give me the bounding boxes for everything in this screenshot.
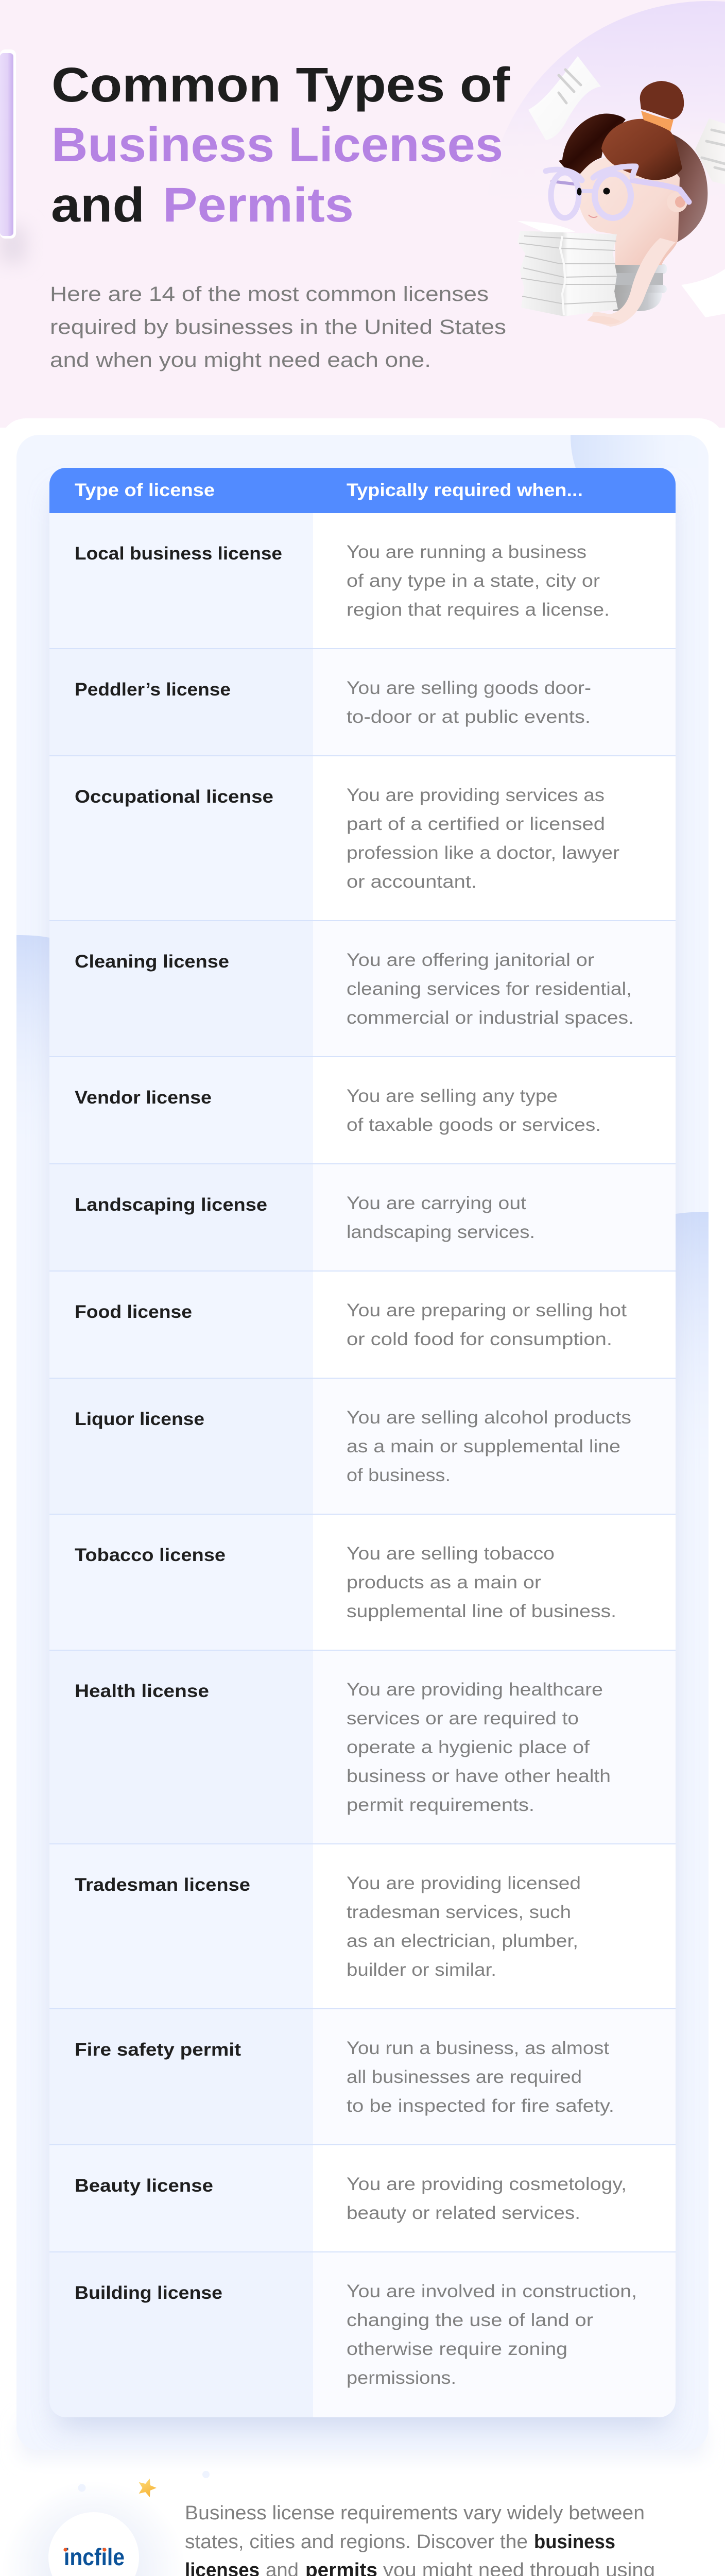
row: cleaning license: [49, 921, 676, 1058]
row: tobacco license: You are selling tobacco: [347, 1544, 555, 1564]
row: building license: You are involved in construction,: [347, 2281, 637, 2301]
row: health license: business or have other health: [347, 1766, 611, 1786]
title: Business Licenses: [51, 117, 503, 172]
footer text: [185, 2502, 655, 2576]
row: food license: Food license: [75, 1302, 192, 1322]
row: tradesman license: builder or similar.: [347, 1960, 496, 1980]
footer logo badge: [2, 2471, 223, 2576]
row: health license: operate a hygienic place of: [347, 1737, 590, 1757]
table header: [49, 468, 676, 513]
row: occupational license: profession like a doctor, lawyer: [347, 843, 619, 863]
row: vendor license: You are selling any type: [347, 1086, 558, 1106]
row: liquor license: You are selling alcohol products: [347, 1408, 631, 1428]
row: occupational license: Occupational license: [75, 787, 273, 807]
character bun: [640, 81, 684, 120]
row: cleaning license: commercial or industrial spaces.: [347, 1008, 634, 1028]
character ear: [667, 192, 687, 212]
character glasses: [546, 166, 689, 218]
row: local business license: [49, 513, 676, 650]
decorative blob left: [16, 935, 49, 1054]
row: peddler's license: You are selling goods door-: [347, 678, 591, 698]
row: health license: Health license: [75, 1681, 209, 1701]
subtitle: required by businesses in the United States: [50, 316, 506, 338]
row: beauty license: beauty or related services.: [347, 2203, 580, 2223]
row: building license: otherwise require zoning: [347, 2339, 567, 2359]
footer text: states, cities and regions. Discover the: [185, 2531, 528, 2553]
panel shadow: [21, 2421, 704, 2458]
row: local business license: Local business license: [75, 544, 282, 564]
row: landscaping license: You are carrying out: [347, 1193, 526, 1213]
row: building license: changing the use of land or: [347, 2310, 593, 2330]
row: tobacco license: products as a main or: [347, 1572, 541, 1592]
row: building license: Building license: [75, 2283, 222, 2303]
row: cleaning license: You are offering janitorial or: [347, 950, 594, 970]
row: vendor license: Vendor license: [75, 1088, 212, 1108]
title: and: [51, 178, 145, 232]
row: liquor license: of business.: [347, 1465, 451, 1485]
row: local business license: region that requires a license.: [347, 600, 610, 620]
row: liquor license: [49, 1379, 676, 1515]
row: food license: You are preparing or selling hot: [347, 1300, 627, 1320]
character front hair: [601, 119, 682, 180]
illustration: character holding paper stack: [517, 56, 725, 327]
row: peddler's license: Peddler’s license: [75, 680, 231, 700]
table header: Typically required when...: [347, 480, 583, 500]
icon: floating paper left: [528, 56, 601, 140]
icon: paper stack: [517, 221, 618, 316]
subtitle: [50, 283, 506, 371]
subtitle: Here are 14 of the most common licenses: [50, 283, 489, 306]
row: occupational license: [49, 756, 676, 922]
row: vendor license: of taxable goods or services.: [347, 1115, 601, 1135]
row: cleaning license: Cleaning license: [75, 952, 229, 972]
row: beauty license: You are providing cosmetology,: [347, 2174, 627, 2194]
title: Common Types of: [51, 58, 510, 112]
row: liquor license: as a main or supplemental line: [347, 1436, 620, 1456]
row: food license: [49, 1272, 676, 1379]
row: local business license: of any type in a state, city or: [347, 571, 600, 591]
row: health license: You are providing healthcare: [347, 1680, 603, 1700]
decorative dots: [25, 2471, 223, 2576]
row: health license: permit requirements.: [347, 1795, 534, 1815]
incfile logo: incfile: [64, 2544, 125, 2570]
footer text: Business license requirements vary widely between: [185, 2502, 645, 2524]
row: tobacco license: [49, 1515, 676, 1651]
row: building license: [49, 2252, 676, 2417]
row: landscaping license: Landscaping license: [75, 1195, 267, 1215]
row: fire safety permit: all businesses are required: [347, 2067, 582, 2087]
row: tradesman license: You are providing licensed: [347, 1873, 581, 1893]
row: landscaping license: [49, 1164, 676, 1272]
header background: [0, 0, 725, 447]
character back hair: [664, 131, 707, 242]
row: cleaning license: cleaning services for residential,: [347, 979, 632, 999]
row: tradesman license: [49, 1844, 676, 2010]
row: landscaping license: landscaping services.: [347, 1222, 535, 1242]
row: health license: [49, 1651, 676, 1845]
row: occupational license: You are providing services as: [347, 785, 605, 805]
character dark hair: [559, 114, 626, 174]
decorative blob right: [676, 1212, 709, 1358]
decorative blob top right: [571, 435, 643, 468]
row: fire safety permit: [49, 2009, 676, 2146]
icon: floating paper bottom: [681, 269, 725, 317]
row: peddler's license: [49, 649, 676, 757]
character arm: [591, 238, 676, 327]
icon: star top: [135, 2476, 159, 2498]
table header: Type of license: [75, 480, 215, 500]
character eyes and smile: [577, 188, 610, 217]
row: local business license: You are running a business: [347, 542, 586, 562]
table shadow: [57, 495, 668, 2428]
title: Permits: [163, 178, 354, 232]
row: tobacco license: Tobacco license: [75, 1545, 226, 1565]
character head and neck: [577, 155, 680, 265]
row: building license: permissions.: [347, 2368, 456, 2388]
footer text: business: [534, 2531, 615, 2553]
row: tradesman license: tradesman services, such: [347, 1902, 571, 1922]
row: peddler's license: to-door or at public events.: [347, 707, 591, 727]
logo circle: [48, 2512, 139, 2576]
icon: floating paper right: [695, 118, 725, 184]
character bun band: [641, 111, 674, 131]
row: tradesman license: as an electrician, plumber,: [347, 1931, 578, 1951]
row: beauty license: Beauty license: [75, 2176, 213, 2196]
row: liquor license: Liquor license: [75, 1409, 204, 1429]
accent bar: [0, 49, 26, 263]
row: food license: or cold food for consumption.: [347, 1329, 612, 1349]
row: fire safety permit: Fire safety permit: [75, 2040, 241, 2060]
character silver base: [613, 264, 667, 311]
row: tobacco license: supplemental line of business.: [347, 1601, 616, 1621]
row: fire safety permit: You run a business, as almost: [347, 2038, 609, 2058]
title: [51, 58, 510, 232]
character hand: [587, 316, 620, 324]
row: beauty license: [49, 2145, 676, 2253]
row: tradesman license: Tradesman license: [75, 1875, 250, 1895]
subtitle: and when you might need each one.: [50, 349, 431, 371]
row: fire safety permit: to be inspected for fire safety.: [347, 2096, 614, 2116]
row: occupational license: part of a certified or licensed: [347, 814, 605, 834]
row: health license: services or are required to: [347, 1708, 579, 1728]
row: vendor license: [49, 1057, 676, 1165]
table: [49, 468, 676, 2417]
panel: table background: [16, 435, 709, 2450]
row: occupational license: or accountant.: [347, 872, 477, 892]
